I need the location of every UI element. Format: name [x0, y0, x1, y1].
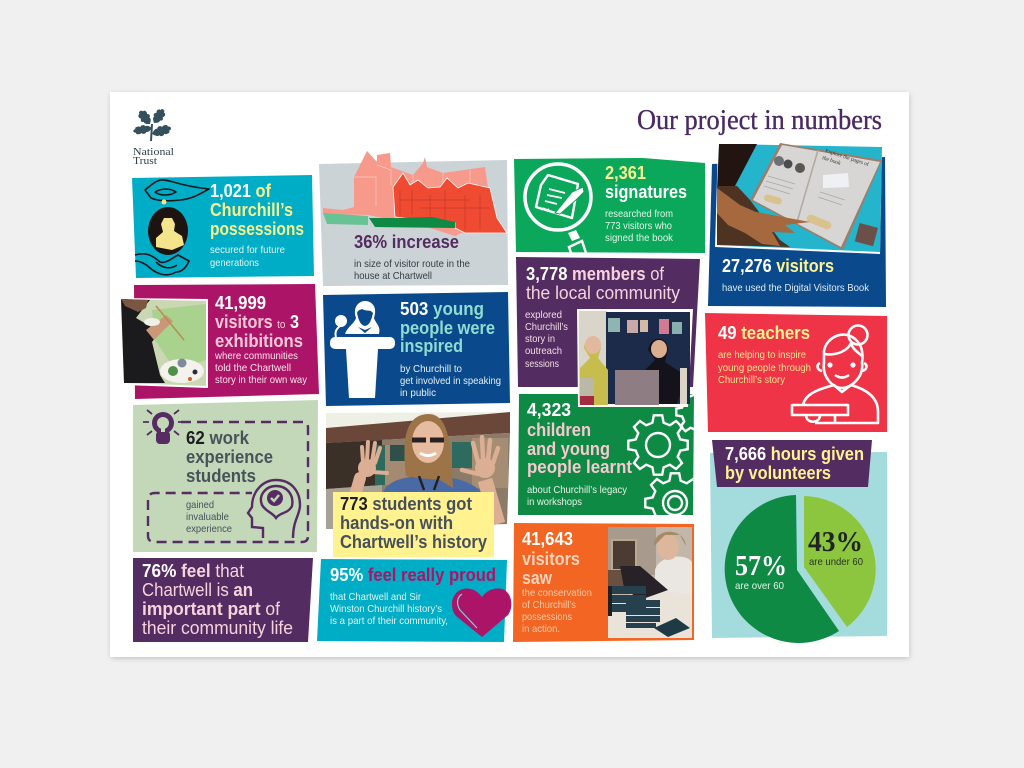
slice: 57% over 60 [725, 495, 839, 643]
icon: teacher with book [792, 326, 878, 423]
caption [400, 363, 501, 399]
stat text [186, 428, 273, 486]
caption: gained [186, 499, 214, 511]
stat text: 2,361 [605, 163, 646, 183]
panel: 503 young people: inspired [400, 336, 463, 356]
caption: told the Chartwell [215, 362, 291, 374]
caption: possessions [522, 611, 572, 623]
panel: 49 teachers [705, 313, 887, 432]
photo: outreach session [577, 309, 693, 407]
caption [214, 350, 308, 386]
panel: 4,323 children [518, 394, 694, 515]
slice: 43% under 60: are under 60 [809, 556, 863, 568]
statement text [142, 561, 293, 638]
stat text [526, 264, 680, 303]
left hand [356, 442, 387, 492]
caption [718, 349, 811, 386]
heading: by volunteers [725, 463, 831, 483]
stat text: 49 teachers [718, 323, 810, 343]
panel: 2,361 signatures: signatures [605, 182, 687, 202]
caption: invaluable [186, 511, 229, 523]
page card [110, 92, 909, 658]
icon: speaker at podium [330, 301, 395, 398]
caption: young people through [718, 362, 811, 374]
caption [522, 587, 592, 635]
icon: head with tick [248, 480, 300, 538]
caption [527, 484, 628, 508]
heading: 7,666 hours given [725, 444, 864, 464]
stat text: 36% increase [354, 232, 459, 252]
panel: 95% feel really proud [317, 559, 511, 642]
slice: 43% under 60: 43% [808, 526, 863, 558]
icon: heart [452, 588, 511, 637]
caption: by Churchill to [400, 363, 462, 375]
stat text: 4,323 [527, 400, 571, 420]
panel: 773 students: hands-on with [340, 513, 453, 533]
title: Our project in numbers [637, 105, 882, 136]
panel: 503 young people [323, 292, 510, 406]
caption [330, 591, 448, 627]
icon: hands holding medal [135, 180, 209, 275]
caption: about Churchill’s legacy [527, 484, 628, 496]
panel: 41,643 visitors: visitors [522, 549, 580, 569]
panel: 62 work experience students [133, 400, 318, 552]
panel: Churchill's possessions: possessions [210, 219, 304, 239]
caption: get involved in speaking [400, 375, 501, 387]
caption: where communities [214, 350, 298, 362]
stat text: 95% feel really proud [330, 565, 496, 585]
icon: magnifier over signed paper [525, 164, 591, 253]
statement text: their community life [142, 618, 293, 638]
panel: 773 students [333, 492, 494, 557]
panel: 7,666 hours volunteers [710, 440, 887, 643]
caption: secured for future [210, 244, 285, 256]
photo: child painting [120, 298, 208, 388]
photo: digital visitors book [715, 143, 882, 254]
National Trust logo [133, 107, 174, 167]
stat text: 41,643 [522, 529, 573, 549]
caption: that Chartwell and Sir [330, 591, 421, 603]
stat text: 3,778 members of [526, 264, 665, 284]
stat text: the local community [526, 283, 680, 303]
caption: have used the Digital Visitors Book [722, 282, 870, 294]
caption: house at Chartwell [354, 270, 432, 282]
right hand [462, 437, 498, 524]
panel: 41,643 visitors [513, 523, 694, 642]
panel: 3,778 members [516, 257, 700, 387]
panel: Churchill's possessions [132, 175, 314, 278]
caption [186, 499, 232, 535]
panel: 773 students: 773 students got [340, 494, 472, 514]
statement text: important part of [142, 599, 281, 619]
caption: in workshops [527, 496, 582, 508]
panel: 4,323 children: and young [527, 439, 610, 459]
caption [605, 208, 674, 244]
caption: story in [525, 333, 555, 345]
caption: 773 visitors who [605, 220, 672, 232]
caption: in public [400, 387, 436, 399]
statement text: Chartwell is an [142, 580, 253, 600]
caption: of Churchill’s [522, 599, 576, 611]
photo: student with raised hands [326, 412, 510, 529]
stat text: 503 young [400, 299, 484, 319]
panel: 503 young people: people were [400, 318, 495, 338]
National Trust logo: Trust [133, 155, 157, 167]
caption [210, 244, 285, 269]
caption: experience [186, 523, 232, 535]
caption: in size of visitor route in the [354, 258, 470, 270]
icon: light bulb [143, 410, 184, 444]
caption: story in their own way [215, 374, 308, 386]
panel: 41,999 visitors: visitors to 3 [215, 312, 299, 332]
caption: Churchill’s story [718, 374, 786, 386]
caption: signed the book [605, 232, 674, 244]
panel: 41,999 visitors: exhibitions [215, 331, 303, 351]
caption: sessions [525, 358, 559, 370]
caption [354, 258, 470, 282]
panel: Churchill's possessions: Churchill’s [210, 200, 293, 220]
caption: are helping to inspire [718, 349, 806, 361]
caption: Churchill’s [525, 321, 568, 333]
caption: in action. [522, 623, 560, 635]
panel: 2,361 signatures [514, 158, 705, 253]
caption: outreach [525, 345, 562, 357]
photo: conservation [608, 527, 692, 638]
panel: 4,323 children: children [527, 420, 591, 440]
panel: 41,999 visitors [120, 284, 319, 399]
icon: oak leaf [133, 107, 172, 141]
stat text: 41,999 [215, 293, 266, 313]
stat text: 27,276 visitors [722, 256, 834, 276]
slice: 57% over 60: 57% [735, 551, 787, 582]
stat text: 1,021 of [210, 181, 272, 201]
photo: digital visitors book: the book [821, 155, 842, 167]
slice: 43% under 60 [804, 496, 876, 627]
caption: the conservation [522, 587, 592, 599]
panel: 41,643 visitors: saw [522, 568, 553, 588]
heading [712, 440, 872, 487]
slice: 57% over 60: are over 60 [735, 580, 784, 592]
caption [525, 309, 568, 370]
panel: 773 students: Chartwell’s history [340, 532, 487, 552]
stat text: 62 work [186, 428, 250, 448]
illustration: Chartwell house [323, 151, 507, 236]
dashed route [148, 422, 308, 542]
National Trust logo: National [133, 146, 174, 158]
panel: 4,323 children: people learnt [527, 457, 632, 477]
stat text: experience [186, 447, 273, 467]
caption: generations [210, 257, 259, 269]
pie chart [725, 495, 876, 643]
panel: 36% increase [319, 151, 508, 286]
caption: Winston Churchill history’s [330, 603, 442, 615]
caption: researched from [605, 208, 673, 220]
panel: 76% feel [133, 558, 313, 642]
caption: is a part of their community, [330, 615, 448, 627]
icon: gears [627, 394, 694, 515]
photo: digital visitors book: Explore the pages of [824, 147, 870, 168]
stat text: students [186, 466, 256, 486]
statement text: 76% feel that [142, 561, 244, 581]
caption: explored [525, 309, 562, 321]
panel: 27,276 visitors [708, 143, 886, 307]
